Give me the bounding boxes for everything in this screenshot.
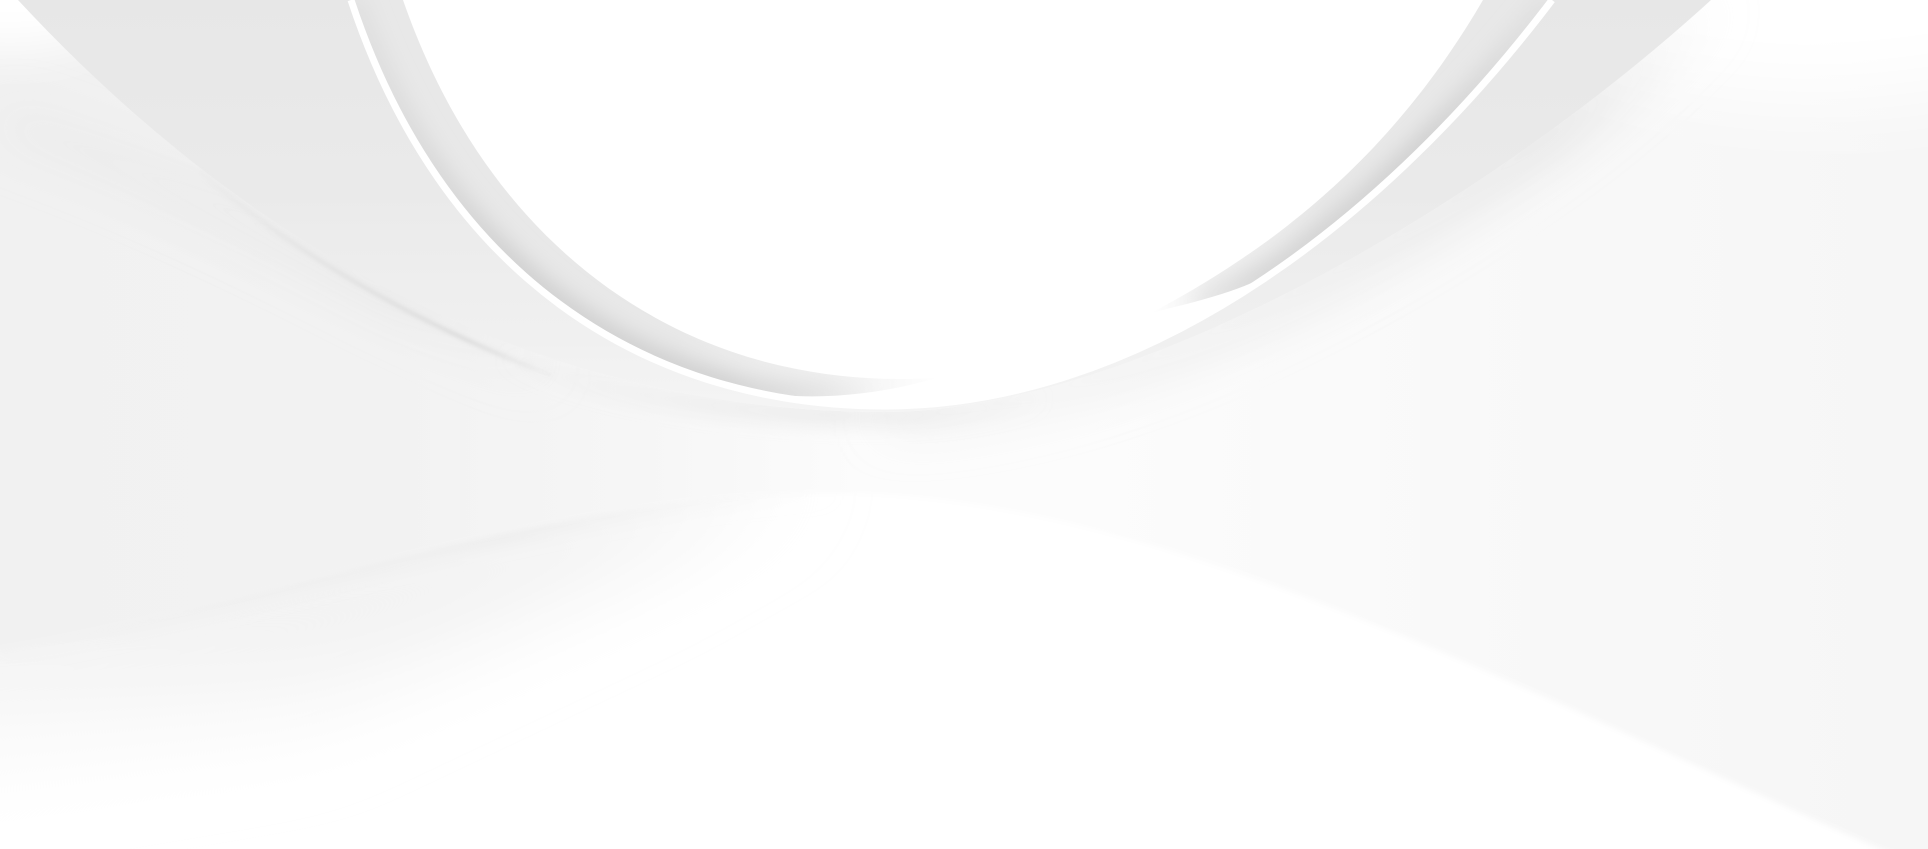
crease along the band's lower-left edge	[200, 172, 553, 376]
right inner crescent	[1180, 0, 1548, 305]
soft shadows cast by the ring band	[732, 88, 1612, 428]
central white opening	[351, 0, 1552, 406]
left inner crescent	[354, 0, 884, 396]
soft shadow below the lower fold, left side	[0, 506, 689, 692]
white ring line	[351, 0, 1552, 406]
ring band	[18, 0, 1711, 412]
